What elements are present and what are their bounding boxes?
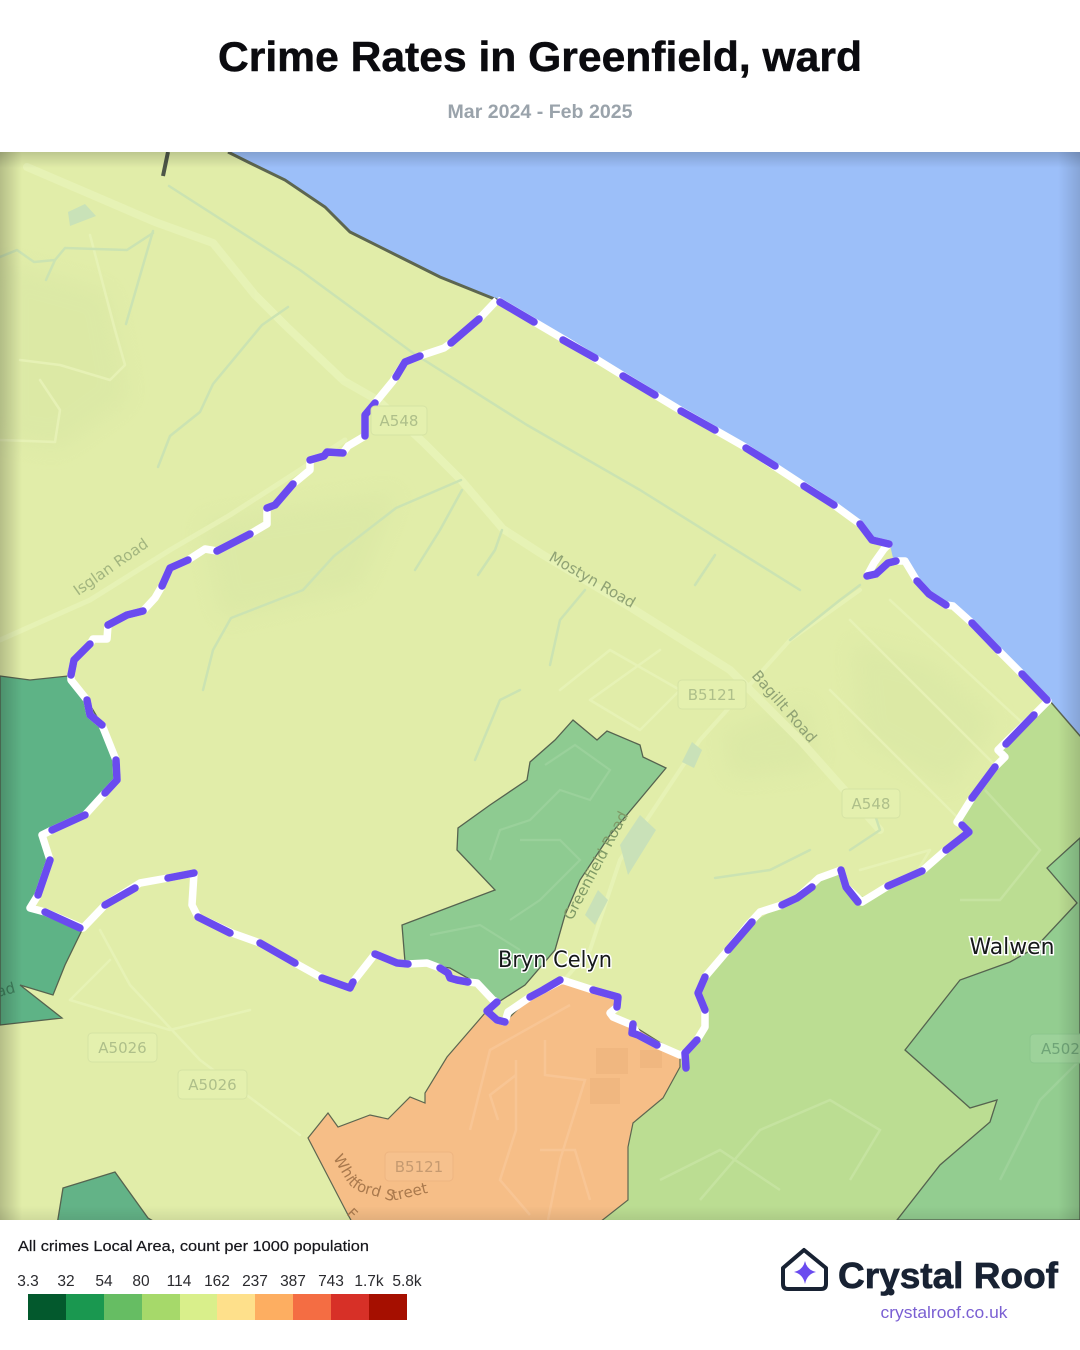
area: low crime west (dark green) <box>0 676 117 1025</box>
road name: partial label bottom: F <box>343 1206 360 1223</box>
roads <box>0 167 1030 1135</box>
map edge vignette <box>0 152 1080 1220</box>
area: high crime south (orange) <box>308 980 680 1222</box>
road shield: B5121 south: B5121 <box>395 1158 443 1176</box>
area: low crime south-west (dark green) <box>57 1171 152 1220</box>
rivers and rail lines <box>0 186 880 878</box>
reservoirs by Greenfield Road <box>585 742 702 925</box>
legend title: All crimes Local Area, count per 1000 population <box>18 1238 369 1255</box>
road name: Whitford Street: Whitford Street <box>334 1152 428 1200</box>
ward boundary: white underlay <box>30 300 1048 1055</box>
place label: Walwen: Walwen <box>970 935 1054 960</box>
road shield: A5026 right <box>178 1070 247 1099</box>
legend <box>17 1238 422 1320</box>
legend colour scale <box>28 1294 407 1320</box>
legend tick labels <box>17 1273 422 1290</box>
road labels <box>0 406 1080 1263</box>
legend tick labels: 1.7k <box>354 1273 384 1290</box>
title: Crime Rates in Greenfield, ward <box>218 33 862 80</box>
map panel <box>0 152 1080 1220</box>
road name: Mostyn Road: Mostyn Road <box>546 548 639 612</box>
road name: Greenfield Road: Greenfield Road <box>560 808 632 923</box>
road shield: A548 east <box>842 789 900 818</box>
area: medium-low crime centre (mid green) <box>402 720 666 1003</box>
road shield: A548 north <box>371 406 427 435</box>
map land base <box>0 152 1080 1220</box>
coastline <box>228 152 1080 737</box>
sea <box>228 152 1080 737</box>
logo: Crystal Roof <box>783 1250 1059 1322</box>
area: medium-low crime east (mid green) <box>897 838 1080 1220</box>
subtitle: date range: Mar 2024 - Feb 2025 <box>448 102 633 123</box>
road shield: A5026 left: A5026 <box>98 1039 147 1057</box>
terrain shading <box>0 260 1000 790</box>
legend tick labels: 80 <box>132 1273 150 1290</box>
road shield: A548 north: A548 <box>380 412 418 430</box>
road shield: B5121 south <box>385 1152 453 1181</box>
website url: crystalroof.co.uk <box>880 1304 1008 1322</box>
legend tick labels: 743 <box>318 1273 344 1290</box>
legend tick labels: 162 <box>204 1273 230 1290</box>
road shield: A502 right edge <box>1030 1034 1080 1063</box>
legend tick labels: 237 <box>242 1273 268 1290</box>
road name: Isglan Road: Isglan Road <box>70 535 152 599</box>
road shield: A548 east: A548 <box>852 795 890 813</box>
legend tick labels: 54 <box>95 1273 113 1290</box>
road shield: A5026 left <box>88 1033 157 1062</box>
icon: y descender dot <box>888 1288 894 1296</box>
area: low crime east (light green) <box>600 700 1080 1220</box>
road shield: B5121: B5121 <box>688 686 736 704</box>
road shield: B5121 <box>678 680 746 709</box>
road name: Bagillt Road: Bagillt Road <box>748 667 820 746</box>
legend tick labels: 387 <box>280 1273 306 1290</box>
wordmark: Crystal Roof <box>838 1255 1059 1296</box>
legend tick labels: 3.3 <box>17 1273 39 1290</box>
road shield: A5026 right: A5026 <box>188 1076 237 1094</box>
legend tick labels: 114 <box>167 1273 192 1290</box>
railway stub at top edge <box>163 152 168 176</box>
place label: Bryn Celyn: Bryn Celyn <box>498 948 612 973</box>
legend tick labels: 5.8k <box>392 1273 422 1290</box>
icon: house with star <box>783 1250 826 1289</box>
ward boundary: purple dashes <box>38 302 1047 1068</box>
pond <box>68 204 96 226</box>
legend tick labels: 32 <box>57 1273 75 1290</box>
